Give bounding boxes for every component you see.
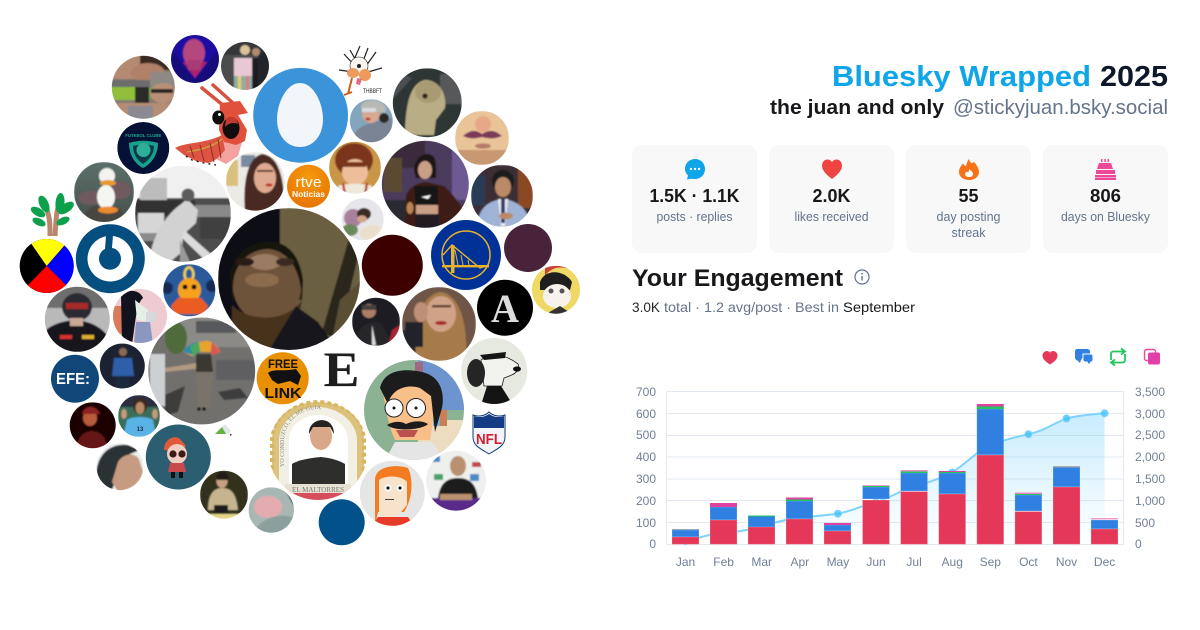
right axis labels: 3,000 [1135,407,1165,421]
cumulative area [686,413,1105,544]
avatar: man in khaki shirt [200,470,248,520]
avatar: free link panther: LINK [264,385,302,402]
avatar: default egg [253,68,348,163]
avatar bubble cluster [20,35,580,546]
icon: info [855,270,869,284]
avatar: free link panther [257,352,309,404]
month labels: Nov [1056,555,1077,569]
avatar: woman lying with flowers [341,198,386,241]
card: day posting streak: day posting [936,210,1001,224]
engagement summary: 3.0K [632,299,661,315]
right axis labels: 1,500 [1135,472,1165,486]
icon: quotes copy [1144,350,1160,364]
card: likes received: 2.0K [812,186,850,206]
reposts bars [748,406,1042,516]
avatar: man in press room [425,450,487,512]
avatar: charlie brown [248,487,296,534]
avatar: free link panther: FREE [268,357,298,371]
avatar: el maltorres badge: EL MALTORRES [292,486,344,494]
avatar: orange bird [161,264,218,317]
avatar: black A: A [491,286,519,331]
avatar: moustache [455,111,509,165]
month labels: Dec [1094,555,1115,569]
right axis labels: 3,500 [1135,385,1165,399]
left axis labels [636,385,656,551]
avatar: selfie collage [112,56,175,119]
avatar: woman with sunglasses [349,99,394,145]
avatar: rtve noticias: rtve [296,174,322,191]
avatar: curly haired woman [402,287,476,362]
avatar: black and white photo [135,165,231,264]
avatar: woman with brown hair [226,152,286,212]
title: Bluesky Wrapped [832,61,1091,93]
avatar: bloom county [339,46,382,95]
display name and handle [770,97,1168,119]
right axis labels: 1,000 [1135,494,1165,508]
title: 2025 [1100,61,1168,93]
avatar: little girl photo [329,141,381,195]
avatar: four colour wheel [19,239,75,294]
engagement summary: September [843,299,915,315]
avatar: orange haired cartoon [360,461,425,526]
avatar: santa cartoon [532,265,580,314]
avatar: old man at microphone [352,297,400,346]
avatar: el maltorres badge [270,400,366,500]
card: likes received [769,145,894,253]
left axis labels: 0 [649,537,656,551]
card: day posting streak: 55 [958,186,978,206]
avatar: futebol clube [117,122,169,174]
card: day posting streak [906,145,1031,253]
month labels: Mar [751,555,772,569]
avatar: E logo [318,341,366,397]
month labels: Feb [713,555,734,569]
icon: repost arrows [1111,348,1125,366]
replies bars [672,409,1118,537]
avatar: bob belcher [364,360,464,460]
avatar: el maltorres badge: YO CONDUZCO, EL ME GUIA [280,405,321,467]
avatar: man in blue sweater [99,343,146,390]
avatar: f1 driver [44,286,111,353]
month labels: Aug [942,555,963,569]
engagement summary [632,299,915,315]
quotes bars [672,404,1118,530]
chart legend [1042,348,1160,366]
avatar: duck [74,162,134,223]
right axis labels: 0 [1135,537,1142,551]
icon: chat bubble [685,159,705,180]
month labels: Jul [906,555,922,569]
right axis labels [1135,385,1165,551]
avatar: black A [477,280,533,336]
card: posts and replies [632,145,757,253]
avatar: efe logo: EFE: [56,371,90,388]
right axis labels: 500 [1135,516,1155,530]
left axis labels: 200 [636,494,656,508]
avatar: man in red light [69,402,117,450]
left axis labels: 600 [636,407,656,421]
avatar: red caterpillar [175,85,248,165]
avatar: group of women [221,42,269,90]
display name and handle: the juan and only [770,97,945,119]
display name and handle: @stickyjuan.bsky.social [953,97,1168,119]
card: days on bluesky: days on Bluesky [1061,210,1151,224]
avatar: solid blue [319,499,365,545]
avatar: purple solid [504,224,552,272]
avatar: marceline cartoon [113,289,167,344]
avatar: man in blue suit [471,165,533,227]
month labels [676,555,1115,569]
month labels: Apr [790,555,809,569]
bar chart: monthly engagement [636,385,1165,569]
left axis labels: 500 [636,428,656,442]
likes bars [672,455,1118,544]
icon: likes heart [1042,351,1058,364]
avatar: shaggy dog [392,68,462,138]
card: days on bluesky [1043,145,1168,253]
right axis labels: 2,500 [1135,428,1165,442]
avatar: nfl shield: NFL [476,431,502,448]
icon: cake [1095,159,1116,180]
avatar: rtve noticias: Noticias [292,189,325,199]
avatar: nfl shield [473,412,505,454]
right axis labels: 2,000 [1135,450,1165,464]
month labels: May [827,555,849,569]
avatar: large selfie looking up [218,208,362,352]
left axis labels: 700 [636,385,656,399]
avatar: efe logo [51,355,99,403]
avatar: green plant [29,193,76,236]
month labels: Jun [866,555,886,569]
line markers [682,410,1108,545]
avatar: small broken image [215,424,232,436]
engagement summary: total · 1.2 avg/post · Best in [664,299,839,315]
avatar: friends character [381,140,472,232]
avatar: rtve noticias [287,165,330,208]
header [770,61,1168,119]
month labels: Oct [1019,555,1038,569]
avatar: umbrella in city [148,317,256,425]
panel: stat cards [632,145,1168,253]
avatar: golden state warriors [431,220,501,290]
avatar: futebol clube: FUTEBOL CLUBE [125,133,161,138]
icon: heart [822,160,842,179]
cumulative line [686,413,1105,541]
avatar: blue ring logo [76,224,145,293]
avatar: bloom county: THBBFT [363,88,382,95]
icon: flame [959,159,979,180]
avatar: snoopy joe cool [461,338,528,405]
avatar: E logo: E [324,341,360,397]
avatar: dark red solid [362,235,423,296]
month labels: Sep [980,555,1001,569]
month labels: Jan [676,555,695,569]
card: posts and replies: 1.5K · 1.1K [650,186,740,206]
left axis labels: 300 [636,472,656,486]
avatar: uruguay footballer [118,395,160,437]
heading: your engagement: Your Engagement [632,265,843,292]
left axis labels: 100 [636,516,656,530]
card: posts and replies: posts · replies [656,210,732,224]
icon: replies chat [1075,349,1093,365]
left axis labels: 400 [636,450,656,464]
avatar: purple statue [170,34,220,84]
avatar: powerpuff girl [145,424,212,490]
card: days on bluesky: 806 [1090,186,1121,206]
card: likes received: likes received [794,210,869,224]
card: day posting streak: streak [952,226,986,240]
avatar: uruguay footballer: 13 [137,427,144,433]
avatar: man in profile [96,443,144,492]
